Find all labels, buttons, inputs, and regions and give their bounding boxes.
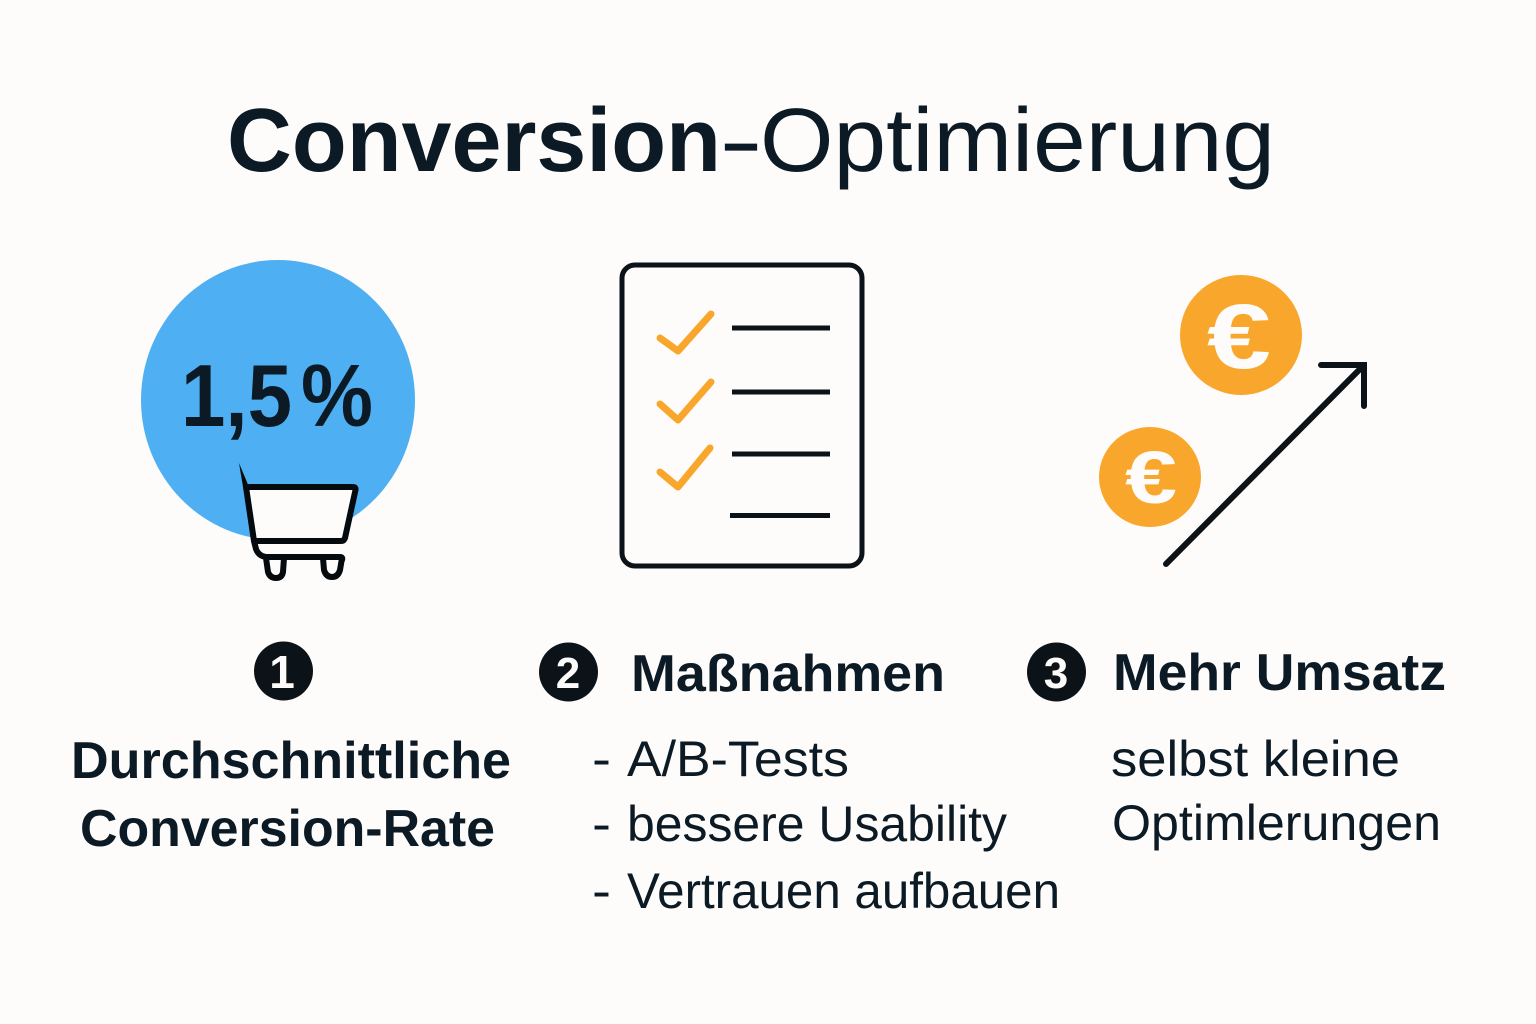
description: selbst kleine <box>1111 731 1400 787</box>
list: measures: Vertrauen aufbauen <box>627 863 1060 919</box>
list: measures: bessere Usability <box>627 796 1007 852</box>
title: - <box>719 91 763 191</box>
number badge 2: 2 <box>556 649 580 698</box>
icon: document frame <box>622 265 862 566</box>
column 2 text <box>539 642 1060 919</box>
panel: checklist <box>622 265 862 566</box>
icon: small euro coin: € <box>1125 436 1177 519</box>
icon: check marks <box>660 314 711 487</box>
list: measures: - <box>592 731 611 787</box>
stat: 1,5 percent: 1,5 <box>181 346 292 445</box>
title <box>227 91 1275 191</box>
number badge 1: 1 <box>269 646 295 698</box>
column 1 text <box>71 642 511 858</box>
title: Conversion <box>227 91 721 191</box>
heading: Durchschnittliche Conversion-Rate <box>71 732 511 858</box>
number badge 3 <box>1027 642 1086 702</box>
number badge 1 <box>254 642 313 700</box>
icon: blue circle <box>141 260 415 540</box>
heading: Mehr Umsatz: Mehr Umsatz <box>1113 644 1446 702</box>
stat: 1,5 percent <box>181 346 373 445</box>
title: Optimierung <box>760 91 1275 191</box>
icon: large euro coin: € <box>1207 286 1271 388</box>
heading: Durchschnittliche Conversion-Rate: Conversion-Rate <box>80 800 495 858</box>
number badge 2 <box>539 642 598 702</box>
description: Optimlerungen <box>1112 795 1441 851</box>
column 3 text <box>1027 642 1446 851</box>
panel: conversion rate <box>141 260 415 578</box>
list: measures: - <box>592 796 611 852</box>
panel: revenue growth <box>1099 275 1364 564</box>
icon: small euro coin <box>1099 427 1201 527</box>
checklist lines <box>730 328 830 516</box>
stat: 1,5 percent: % <box>301 346 373 445</box>
heading: Durchschnittliche Conversion-Rate: Durchschnittliche <box>71 732 511 790</box>
list: measures: A/B-Tests <box>627 731 849 787</box>
icon: cart handle spike <box>239 463 249 487</box>
icon: large euro coin <box>1180 275 1302 395</box>
description <box>1111 731 1441 851</box>
number badge 3: 3 <box>1044 649 1068 698</box>
heading: Maßnahmen: Maßnahmen <box>631 645 945 703</box>
list: measures: - <box>592 863 611 919</box>
arrow: upward trend <box>1166 365 1364 564</box>
list: measures <box>592 731 1060 919</box>
icon: shopping cart <box>246 487 356 578</box>
